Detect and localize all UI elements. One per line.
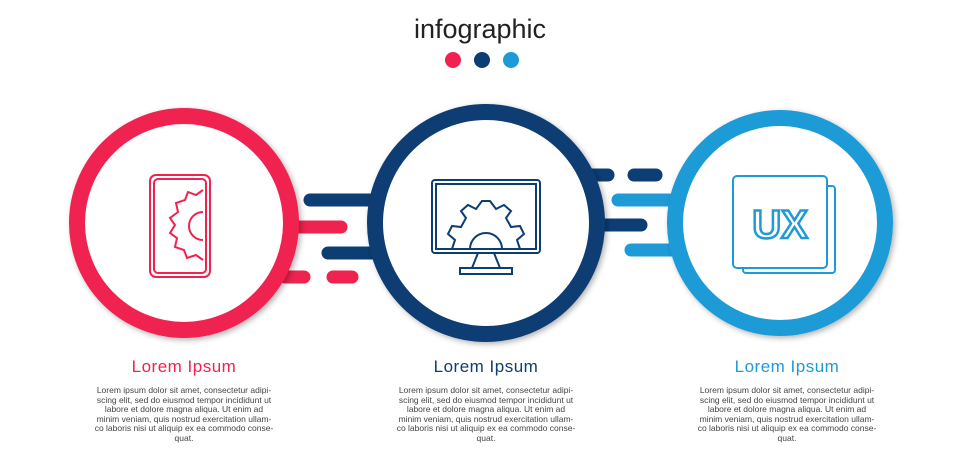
text 2: co laboris nisi ut aliquip ex ea commodo conse- — [397, 423, 575, 433]
text 1 — [95, 385, 273, 443]
text 3: quat. — [778, 433, 796, 443]
icon: phone gear — [150, 175, 210, 277]
heading 1: Lorem Ipsum — [132, 357, 236, 376]
text 1: co laboris nisi ut aliquip ex ea commodo conse- — [95, 423, 273, 433]
text 1: scing elit, sed do eiusmod tempor incididunt ut — [97, 395, 271, 405]
connectors pink-navy — [285, 200, 372, 277]
title: infographic — [414, 14, 546, 44]
dots — [445, 52, 519, 68]
text 1: quat. — [175, 433, 193, 443]
icon: UX: UX — [752, 203, 808, 247]
text 2: labore et dolore magna aliqua. Ut enim ad — [407, 404, 565, 414]
heading 2: Lorem Ipsum — [434, 357, 538, 376]
text 3: labore et dolore magna aliqua. Ut enim ad — [708, 404, 866, 414]
text 1: minim veniam, quis nostrud exercitation ullam- — [97, 414, 271, 424]
text 2 — [397, 385, 575, 443]
text 2: Lorem ipsum dolor sit amet, consectetur adipi- — [399, 385, 573, 395]
icon: monitor gear — [432, 180, 540, 274]
connectors navy-blue — [590, 175, 680, 250]
heading 3: Lorem Ipsum — [735, 357, 839, 376]
text 3: Lorem ipsum dolor sit amet, consectetur adipi- — [700, 385, 874, 395]
text 3: scing elit, sed do eiusmod tempor incididunt ut — [700, 395, 874, 405]
circle pink — [77, 116, 291, 330]
text 3 — [698, 385, 876, 443]
icon: UX — [733, 176, 835, 273]
circle blue — [675, 118, 885, 328]
text 1: labore et dolore magna aliqua. Ut enim ad — [105, 404, 263, 414]
circle navy — [375, 112, 597, 334]
text 2: quat. — [477, 433, 495, 443]
text 3: minim veniam, quis nostrud exercitation ullam- — [700, 414, 874, 424]
text 1: Lorem ipsum dolor sit amet, consectetur adipi- — [97, 385, 271, 395]
text 3: co laboris nisi ut aliquip ex ea commodo conse- — [698, 423, 876, 433]
text 2: minim veniam, quis nostrud exercitation ullam- — [399, 414, 573, 424]
text 2: scing elit, sed do eiusmod tempor incididunt ut — [399, 395, 573, 405]
